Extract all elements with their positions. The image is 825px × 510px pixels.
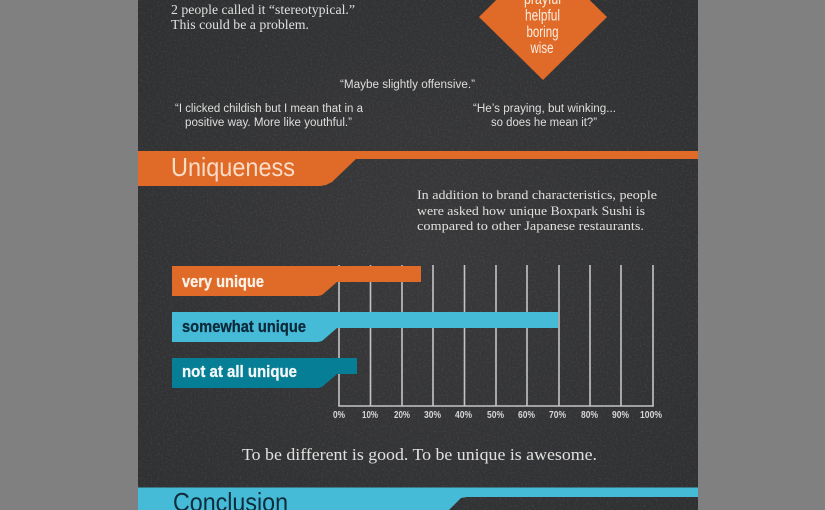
text block: uniqueness intro: were asked how unique Boxpark Sushi is (417, 203, 645, 218)
text block: stereotypical note: This could be a problem. (171, 17, 309, 32)
axis labels: 80% (581, 410, 598, 421)
chalkboard panel (138, 0, 698, 510)
orange diamond with characteristics: helpful (525, 8, 560, 24)
chart grid (338, 265, 654, 406)
orange diamond with characteristics: boring (526, 24, 558, 41)
bar: not at all unique: not at all unique (182, 362, 297, 381)
section header: Uniqueness (138, 151, 698, 186)
quote: praying: “He’s praying, but winking... (473, 103, 616, 115)
text block: stereotypical note (171, 2, 355, 32)
quote: praying (473, 103, 616, 129)
quote: praying: so does he mean it?” (491, 117, 597, 129)
text block: stereotypical note: 2 people called it “stereotypical.” (171, 2, 355, 17)
bar: very unique: very unique (182, 272, 264, 291)
axis labels: 0% (333, 410, 345, 421)
axis labels: 100% (640, 410, 662, 421)
axis labels: 90% (612, 410, 629, 421)
bar: not at all unique (172, 358, 357, 388)
quote: childish: positive way. More like youthful.” (185, 117, 352, 129)
axis labels (333, 410, 662, 421)
quote: slightly offensive: “Maybe slightly offensive.” (340, 79, 475, 91)
text block: uniqueness intro: compared to other Japanese restaurants. (417, 218, 644, 233)
axis labels: 70% (549, 410, 566, 421)
axis labels: 30% (424, 410, 441, 421)
orange diamond with characteristics: wise (530, 40, 554, 57)
bar chart: uniqueness (172, 265, 662, 421)
tagline: To be different is good. To be unique is awesome. (242, 445, 597, 464)
axis labels: 10% (362, 410, 378, 421)
text block: uniqueness intro (417, 187, 657, 233)
section header: Conclusion (138, 487, 698, 510)
orange diamond with characteristics (479, 0, 607, 80)
bar: somewhat unique: somewhat unique (182, 317, 306, 336)
bar: somewhat unique (172, 312, 558, 342)
text block: uniqueness intro: In addition to brand characteristics, people (417, 187, 657, 202)
axis labels: 50% (487, 410, 504, 421)
axis labels: 60% (518, 410, 535, 421)
axis labels: 20% (394, 410, 410, 421)
bar: very unique (172, 266, 421, 296)
axis labels: 40% (455, 410, 472, 421)
section header: Uniqueness: Uniqueness (171, 152, 295, 182)
quote: childish (175, 103, 364, 129)
quote: childish: “I clicked childish but I mean that in a (175, 103, 364, 115)
